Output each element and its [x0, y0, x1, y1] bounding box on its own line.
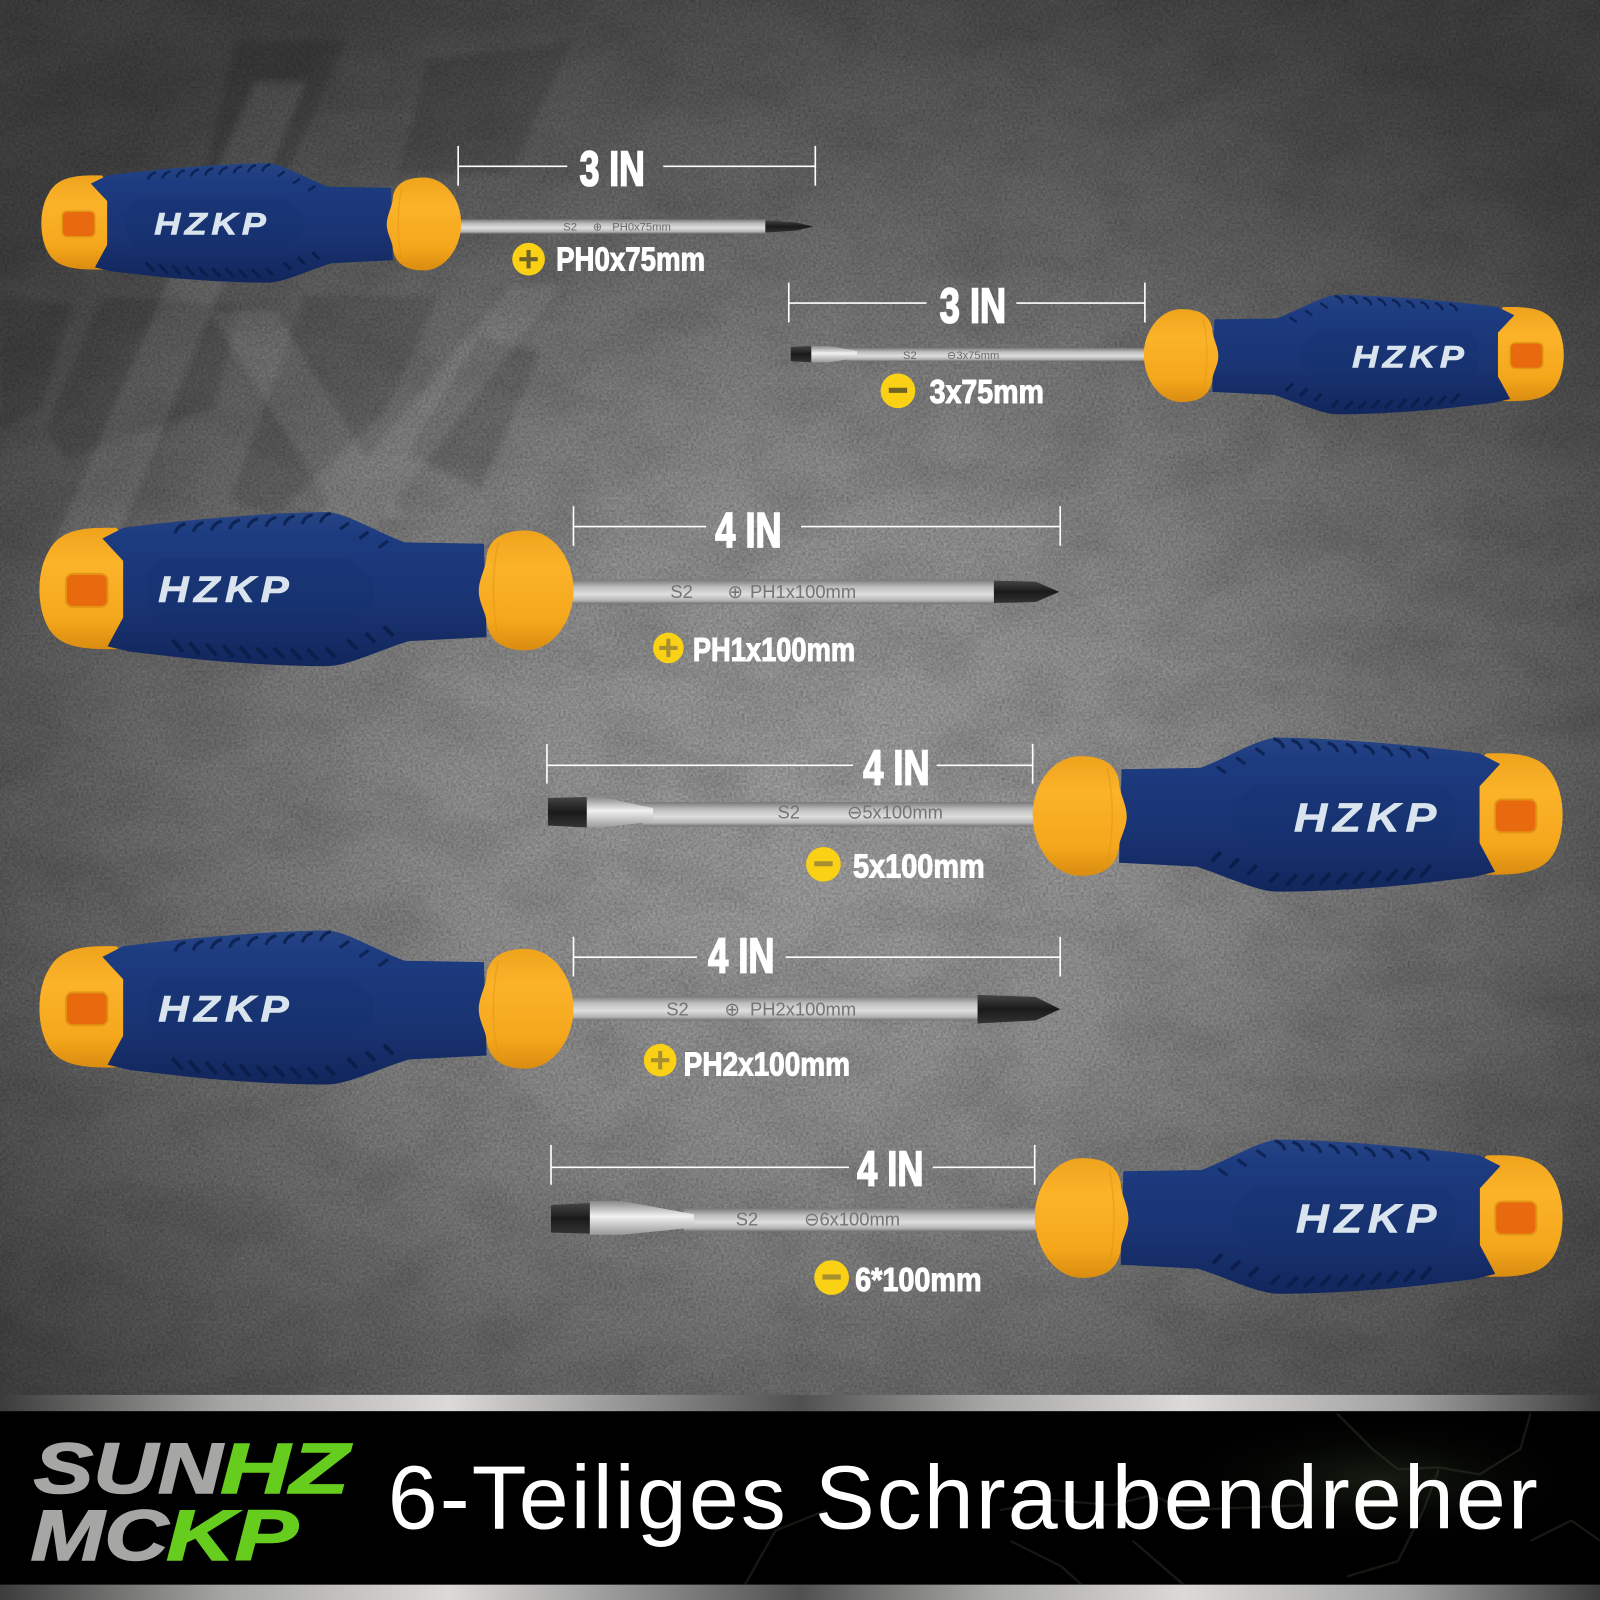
- dimension: 3 IN (top): 3 IN: [580, 143, 645, 197]
- label: PH1x100mm: [653, 632, 855, 669]
- shaft and tip: S2: [563, 222, 577, 234]
- shaft and tip: [460, 219, 813, 234]
- logo: SUNHZ MCKP: KP: [166, 1496, 298, 1576]
- shaft and blade: S2: [736, 1209, 758, 1230]
- logo: SUNHZ MCKP: [31, 1429, 352, 1576]
- shaft and tip: ⊕: [593, 222, 602, 234]
- shaft and tip: PH0x75mm: [612, 222, 671, 234]
- handle: HZKP: [1294, 795, 1442, 841]
- label: 6*100mm: [814, 1260, 982, 1299]
- handle: HZKP: [1352, 338, 1468, 374]
- dimension: 4 IN (fourth): [547, 742, 1033, 796]
- logo: SUNHZ MCKP: HZ: [220, 1429, 352, 1509]
- handle: [41, 163, 461, 283]
- shaft and tip: ⊕: [724, 998, 740, 1019]
- shaft and blade: S2: [778, 801, 800, 822]
- screwdriver 3: PH1x100mm: [39, 512, 1059, 666]
- handle: [1033, 738, 1563, 892]
- label: 5x100mm: [806, 847, 985, 886]
- screwdriver 4: 5x100mm: [548, 738, 1563, 892]
- label: 3x75mm: 3x75mm: [930, 374, 1044, 411]
- dimension: 4 IN (fifth): 4 IN: [708, 929, 774, 983]
- handle: [39, 930, 574, 1085]
- dimension: 4 IN (fourth): 4 IN: [863, 742, 930, 796]
- handle: HZKP: [158, 988, 294, 1029]
- handle: HZKP: [154, 206, 270, 242]
- label: PH2x100mm: PH2x100mm: [684, 1047, 850, 1084]
- shaft and blade: [548, 797, 1036, 828]
- logo: SUNHZ MCKP: MC: [31, 1496, 170, 1576]
- handle: HZKP: [158, 569, 294, 610]
- shaft and tip: PH2x100mm: [750, 998, 856, 1019]
- label: 6*100mm: 6*100mm: [855, 1262, 982, 1299]
- label: 3x75mm: [881, 373, 1044, 411]
- label: PH0x75mm: [512, 241, 705, 278]
- screwdriver 6: 6x100mm: [551, 1140, 1563, 1294]
- screwdriver 2: 3x75mm: [791, 295, 1564, 414]
- shaft and blade: [791, 346, 1148, 362]
- shaft and tip: S2: [666, 998, 689, 1019]
- handle: [39, 512, 574, 666]
- shaft and tip: [571, 995, 1060, 1023]
- dimension: 4 IN (third): [573, 504, 1060, 558]
- dimension: 4 IN (third): 4 IN: [715, 504, 782, 558]
- handle: [1144, 295, 1564, 414]
- shaft and blade: ⊖3x75mm: [947, 350, 999, 362]
- shaft and blade: S2: [903, 350, 917, 362]
- screwdriver 1: PH0x75mm: [41, 163, 813, 283]
- label: 5x100mm: 5x100mm: [853, 849, 985, 886]
- shaft and blade: ⊖6x100mm: [804, 1209, 900, 1230]
- dimension: 3 IN (top): [458, 143, 815, 197]
- handle: HZKP: [1296, 1196, 1442, 1242]
- shaft and tip: S2: [670, 581, 693, 602]
- label: PH0x75mm: PH0x75mm: [556, 241, 705, 278]
- shaft and tip: [571, 580, 1059, 604]
- shaft and blade: [551, 1201, 1039, 1235]
- dimension: 3 IN (second): [789, 279, 1145, 333]
- label: PH2x100mm: [644, 1044, 850, 1084]
- shaft and tip: PH1x100mm: [750, 581, 856, 602]
- label: PH1x100mm: PH1x100mm: [693, 632, 855, 669]
- handle: [1035, 1140, 1563, 1294]
- screwdriver 5: PH2x100mm: [39, 930, 1060, 1085]
- footer band: [0, 1395, 1600, 1600]
- logo: SUNHZ MCKP: SUN: [34, 1429, 224, 1509]
- dimension: 4 IN (fifth): [573, 929, 1060, 983]
- shaft and blade: ⊖5x100mm: [847, 801, 943, 822]
- dimension: 3 IN (second): 3 IN: [940, 279, 1006, 333]
- dimension: 4 IN (sixth): 4 IN: [857, 1143, 923, 1197]
- title: 6-Teiliges Schraubendreher: [388, 1449, 1538, 1549]
- shaft and tip: ⊕: [728, 581, 743, 602]
- dimension: 4 IN (sixth): [551, 1143, 1035, 1197]
